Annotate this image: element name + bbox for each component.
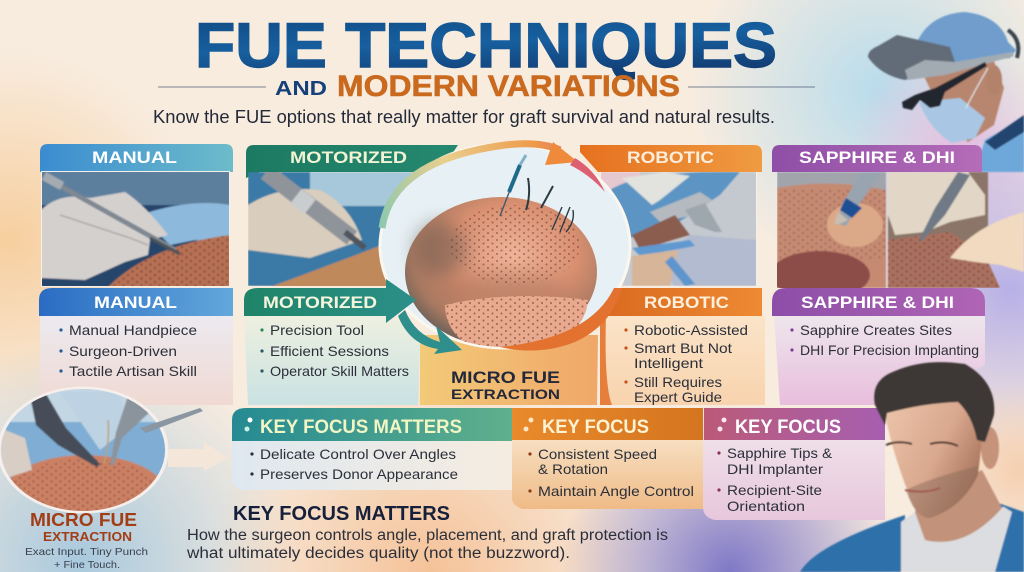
manual photo: gloved hand with punch (41, 171, 230, 287)
sapphire top header (772, 145, 982, 172)
orange focus bullets (528, 446, 694, 499)
sapphire bullets: DHI For Precision Implanting (800, 342, 979, 358)
label: micro FUE extraction (25, 510, 148, 571)
panel: key focus matters (teal) (232, 408, 512, 490)
orange focus header: KEY FOCUS (542, 417, 649, 438)
motorized photo: gloved hand with motor (248, 172, 420, 287)
scalp dome (405, 197, 597, 347)
manual bullets: Manual Handpiece (69, 322, 197, 338)
sapphire bullets: Sapphire Creates Sites (800, 322, 952, 338)
panel: micro FUE extraction label: MICRO FUE (451, 368, 560, 387)
purple focus bullets: Recipient-Site (727, 482, 822, 498)
arrow: ring from motorized to robotic (382, 142, 605, 228)
orange focus bullets: Maintain Angle Control (538, 483, 694, 499)
purple focus body (703, 440, 885, 520)
orange focus bullets: & Rotation (538, 461, 608, 477)
subtitle: Know the FUE options that really matter for graft survival and natural results. (153, 107, 775, 127)
robotic bullets: Still Requires (634, 374, 722, 390)
arrow: motorized lower header pointing to scalp: MOTORIZED (263, 293, 377, 312)
figure: small circle micro FUE scalp (0, 386, 203, 514)
title line two (158, 70, 815, 103)
title line two: AND (275, 78, 327, 100)
manual bullets: Surgeon-Driven (69, 343, 177, 359)
sapphire bullets (774, 316, 985, 405)
panel: sapphire and DHI (770, 145, 1024, 405)
arrow: to key focus (168, 442, 228, 471)
motorized top header: MOTORIZED (290, 148, 407, 167)
figure: man looking down (800, 362, 1024, 572)
teal focus body (232, 441, 512, 490)
teal focus bullets: Delicate Control Over Angles (260, 446, 456, 462)
purple focus bullets: DHI Implanter (727, 461, 823, 477)
label: micro FUE extraction: MICRO FUE (30, 510, 137, 530)
robotic lower header: ROBOTIC (644, 293, 729, 312)
sapphire lower header (772, 288, 985, 316)
sapphire top header: SAPPHIRE & DHI (799, 148, 955, 167)
title (158, 11, 815, 103)
panel: key focus (purple) (703, 408, 885, 520)
motorized bullets (244, 316, 420, 405)
arrow: motorized lower header pointing to scalp (244, 279, 416, 323)
central scalp illustration (380, 142, 630, 354)
title line two: MODERN VARIATIONS (337, 70, 680, 103)
manual top header (40, 144, 233, 172)
purple focus header: KEY FOCUS (735, 417, 841, 438)
arc: lower right (500, 288, 622, 351)
robotic lower header (600, 288, 762, 316)
bottom note: key focus matters: How the surgeon controls angle, placement, and graft protection is (187, 527, 668, 544)
purple focus header (704, 408, 885, 440)
orange focus body (512, 440, 703, 509)
title line one: FUE TECHNIQUES (195, 11, 777, 81)
robotic bullets: Intelligent (634, 355, 703, 371)
circle backdrop (380, 144, 630, 348)
label: micro FUE extraction: Exact Input. Tiny Punch (25, 546, 148, 558)
manual lower header: MANUAL (94, 293, 177, 312)
robotic bullets (600, 316, 765, 405)
orange focus bullets: Consistent Speed (538, 446, 657, 462)
motorized bullets: Precision Tool (270, 322, 364, 338)
robotic bullets: Expert Guide (634, 389, 722, 405)
panel: manual (39, 144, 233, 405)
sapphire lower header: SAPPHIRE & DHI (801, 293, 954, 312)
teal focus header: KEY FOCUS MATTERS (260, 417, 462, 438)
bottom note: key focus matters: what ultimately decides quality (not the buzzword). (186, 545, 570, 562)
purple focus bullets: Orientation (727, 498, 805, 514)
motorized bullets: Operator Skill Matters (270, 363, 409, 379)
figure: surgeon with headlamp (868, 12, 1024, 172)
robotic top header: ROBOTIC (627, 148, 714, 167)
panel: robotic (580, 145, 765, 405)
robotic bullets: Robotic-Assisted (634, 322, 748, 338)
sapphire photo: scalp sites and implanter (777, 172, 1024, 288)
motorized top header (246, 145, 458, 178)
manual bullets (40, 316, 233, 405)
label: micro FUE extraction: + Fine Touch. (54, 559, 120, 571)
label: micro FUE extraction: EXTRACTION (43, 529, 132, 544)
teal focus header (232, 408, 512, 441)
teal focus bullets (250, 446, 458, 482)
arrow: curved teal (398, 310, 462, 354)
bottom note: key focus matters: KEY FOCUS MATTERS (233, 503, 450, 525)
manual bullets: Tactile Artisan Skill (69, 363, 197, 379)
panel: micro FUE extraction label: EXTRACTION (451, 386, 560, 402)
panel: micro FUE extraction label (420, 335, 598, 405)
robotic photo: robot arm (600, 171, 757, 287)
manual top header: MANUAL (92, 148, 177, 167)
teal focus bullets: Preserves Donor Appearance (260, 466, 458, 482)
motorized bullets: Efficient Sessions (270, 343, 389, 359)
purple focus bullets (717, 445, 833, 514)
bottom note: key focus matters (186, 503, 668, 562)
robotic bullets: Smart But Not (634, 340, 732, 356)
panel: motorized (244, 145, 458, 405)
manual lower header (39, 288, 233, 316)
panel: key focus (orange) (512, 408, 703, 509)
robotic top header (580, 145, 762, 172)
instruments and grafts (500, 155, 573, 232)
purple focus bullets: Sapphire Tips & (727, 445, 833, 461)
orange focus header (512, 408, 703, 440)
